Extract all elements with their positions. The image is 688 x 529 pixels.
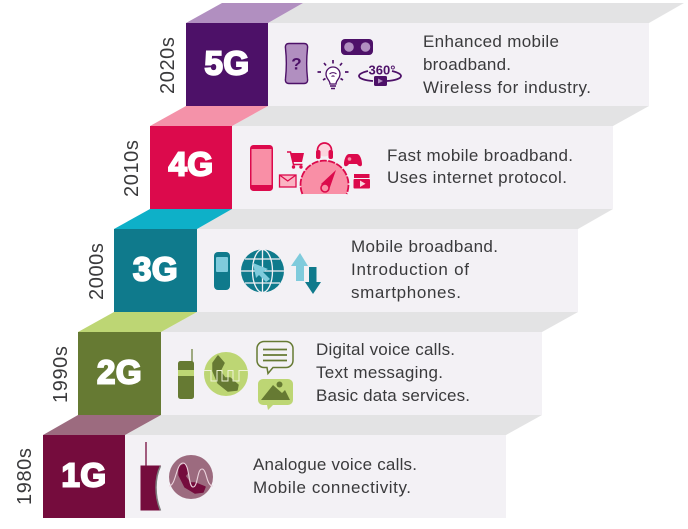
icon: shopping cart: [287, 152, 304, 169]
text: 3G description: Mobile broadband.: [351, 237, 498, 256]
icon: envelope: [280, 175, 296, 187]
icon: 360 degree video: 360°: [369, 62, 395, 78]
panel: 4G step: [121, 106, 649, 209]
text: 3G description: [351, 237, 498, 302]
text: 2G description: [316, 340, 470, 405]
text: 3G description: Introduction of: [351, 260, 469, 279]
year label: 1990s: 1990s: [50, 346, 72, 403]
icon: phone handset with digital signal: [204, 352, 248, 396]
heading: 5G: 5G: [204, 44, 250, 82]
year label: 2000s: 2000s: [86, 242, 108, 300]
icon: text message bubble: [257, 342, 293, 374]
icon: smartphone: [250, 145, 273, 191]
icon: headphones: [316, 143, 333, 159]
text: 4G description: Fast mobile broadband.: [387, 146, 573, 165]
year label: 2010s: 2010s: [121, 140, 143, 197]
text: 5G description: broadband.: [423, 55, 511, 74]
text: 1G description: [253, 455, 417, 497]
icon: brick phone: [140, 442, 161, 510]
heading: 4G: 4G: [168, 146, 214, 182]
icon: phone handset with analogue wave: [169, 455, 213, 499]
heading: 2G: 2G: [97, 354, 142, 390]
icon: clapperboard: [354, 174, 370, 188]
icon: up and down arrows: [291, 253, 321, 294]
text: 4G description: Uses internet protocol.: [387, 168, 567, 187]
text: 1G description: Mobile connectivity.: [253, 478, 411, 497]
panel: 1G step: [14, 415, 542, 518]
heading: 1G: 1G: [61, 456, 107, 494]
year label: 2020s: 2020s: [157, 36, 179, 94]
icon: game controller: [344, 154, 362, 166]
panel: 2G step: [50, 312, 578, 415]
text: 2G description: Basic data services.: [316, 386, 470, 405]
text: 2G description: Digital voice calls.: [316, 340, 455, 359]
icon: speedometer: [300, 161, 348, 194]
icon: VR goggles: [341, 39, 373, 55]
icon: light bulb: [318, 60, 348, 88]
text: 5G description: Enhanced mobile: [423, 32, 559, 51]
heading: 3G: 3G: [133, 250, 178, 288]
text: 4G description: [387, 146, 573, 187]
year label: 1980s: 1980s: [14, 448, 36, 505]
icon: 360 degree video: [359, 62, 401, 86]
text: 5G description: [423, 32, 591, 97]
text: 3G description: smartphones.: [351, 283, 461, 302]
panel: 5G step: [157, 3, 684, 106]
icon: early mobile phone: [178, 349, 194, 399]
icon: picture message bubble: [258, 379, 293, 410]
panel: 3G step: [86, 209, 613, 312]
text: 2G description: Text messaging.: [316, 363, 443, 382]
text: 1G description: Analogue voice calls.: [253, 455, 417, 474]
icon: 5G phone with question mark: [285, 44, 308, 84]
text: 5G description: Wireless for industry.: [423, 78, 591, 97]
icon: globe with cursor: [241, 250, 284, 292]
icon: mobile phone: [214, 252, 230, 290]
icon: 5G phone with question mark: ?: [291, 54, 302, 74]
